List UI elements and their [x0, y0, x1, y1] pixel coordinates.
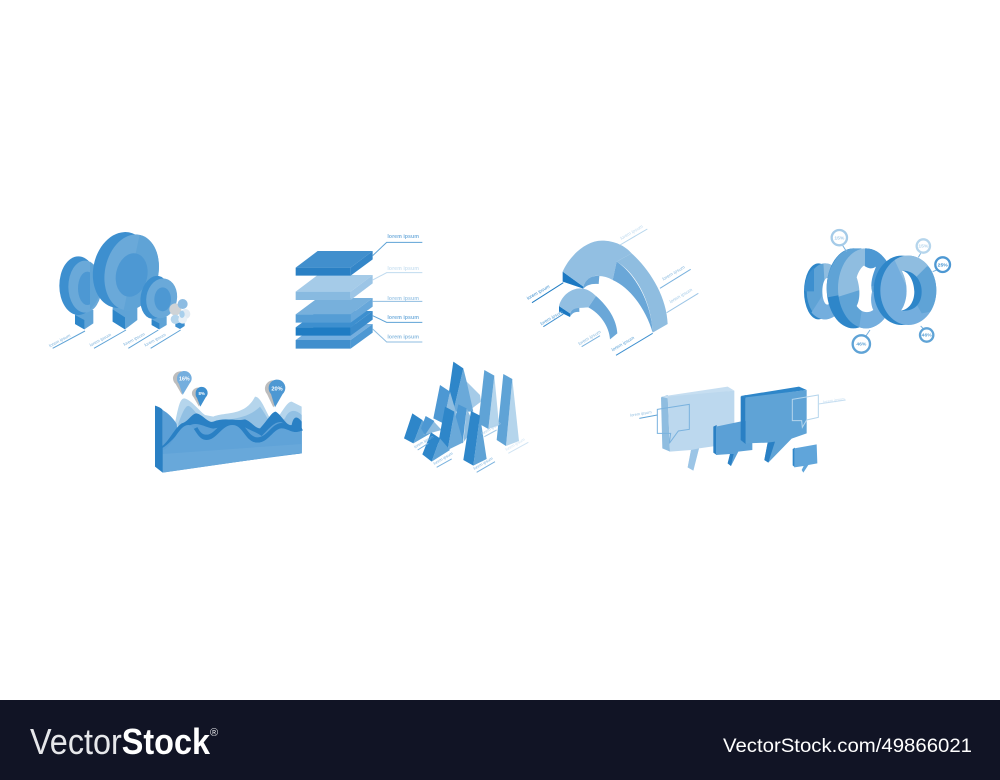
front wave and base [163, 425, 302, 473]
plate 4 [296, 311, 373, 336]
left ring [804, 263, 834, 320]
bubble: large light [661, 387, 734, 471]
plate 3 [296, 298, 373, 323]
left side wall [155, 406, 163, 473]
dark valley band [195, 422, 302, 440]
leader lines and labels: lorem ipsum [539, 309, 564, 326]
pin: 8%: 8% [199, 391, 205, 396]
base highlight strip [163, 444, 302, 473]
pin: left [59, 256, 102, 329]
panel: isometric wave area chart [155, 371, 302, 473]
pin: large [92, 232, 159, 330]
percentage callouts: 15% [918, 244, 929, 250]
prism: left low 2 [421, 416, 442, 435]
panel: interlocking donut rings [804, 230, 950, 353]
prism: front right [463, 411, 487, 466]
percentage callouts [832, 230, 950, 353]
prism: second right [478, 370, 499, 429]
leader lines and labels: lorem ipsum [526, 284, 551, 301]
leader lines and labels [48, 330, 181, 348]
prism: far right [497, 374, 519, 446]
callouts: lorem ipsum labels: lorem ipsum [387, 296, 419, 302]
outline bubble: right [792, 395, 846, 427]
callouts: lorem ipsum labels: lorem ipsum [387, 234, 419, 240]
leader lines and labels: lorem ipsum [480, 420, 502, 436]
plate 2 [296, 275, 373, 300]
percentage callouts: 15% [834, 235, 845, 241]
leader lines and labels [526, 224, 698, 355]
panel: layered plates [296, 234, 422, 349]
leader lines and labels: lorem ipsum [122, 331, 146, 347]
pin: 16% [173, 371, 192, 395]
prism: centre [452, 404, 475, 443]
leader lines and labels: lorem ipsum [577, 329, 602, 346]
leader lines and labels: lorem ipsum [432, 450, 454, 466]
prism: front left [422, 432, 450, 462]
pin: 16%: 16% [179, 376, 190, 382]
callouts: lorem ipsum labels: lorem ipsum [387, 335, 419, 341]
dark wave band [155, 412, 302, 470]
leader lines and labels [413, 420, 528, 472]
leader lines and labels: lorem ipsum [611, 335, 635, 352]
percentage callouts: 25% [938, 262, 948, 268]
leader lines and labels: lorem ipsum [619, 224, 644, 241]
leader lines and labels: lorem ipsum [661, 264, 686, 282]
leader lines and labels: lorem ipsum [48, 333, 72, 348]
pin: 8% [192, 387, 208, 407]
left fill behind wave [163, 410, 180, 457]
panel: triangular prism chart [404, 362, 528, 472]
plate 1 [296, 251, 373, 276]
panel: circle pin chart [48, 227, 190, 348]
leader lines and labels: lorem ipsum [669, 287, 693, 304]
panel: wifi-style arches [526, 224, 698, 355]
pin: 20%: 20% [271, 387, 283, 393]
mid wave layer [178, 406, 302, 457]
infographic canvas [0, 226, 1000, 780]
percentage callouts: 46% [922, 333, 932, 339]
pin: medium [137, 274, 180, 329]
bubble: medium [713, 420, 752, 466]
outline bubble: left: lorem ipsum [630, 409, 653, 418]
registered mark: ® [210, 727, 218, 739]
leader lines and labels: lorem ipsum [143, 332, 167, 348]
leader lines and labels: lorem ipsum [504, 436, 526, 452]
callouts: lorem ipsum labels: lorem ipsum [387, 266, 419, 272]
prism: front centre [438, 407, 463, 450]
leader lines and labels: lorem ipsum [472, 455, 494, 471]
pin: small with grey segment [169, 299, 190, 329]
panel: speech bubbles [630, 387, 846, 473]
bubble: small [793, 444, 817, 473]
footer image id: VectorStock.com/49866021 [723, 736, 972, 757]
leader lines and labels: lorem ipsum [89, 332, 112, 348]
callouts: lorem ipsum labels: lorem ipsum [387, 315, 419, 321]
middle blue wave [155, 422, 302, 472]
percentage callouts: 46% [856, 342, 867, 348]
prism: left low [404, 413, 432, 443]
prism: middle back [433, 385, 458, 423]
footer logo: VectorStock [30, 721, 211, 762]
back wave layer [175, 397, 302, 453]
middle ring [826, 248, 887, 328]
outline bubble: right: lorem ipsum [823, 396, 846, 404]
large arch [563, 241, 668, 333]
small arch [559, 288, 617, 339]
footer bar [0, 700, 1000, 780]
prism: back tall [449, 362, 481, 412]
callouts: lorem ipsum labels [373, 234, 422, 342]
plate 5 [296, 324, 373, 349]
bubble: large blue [741, 387, 807, 463]
pin: 20% [265, 380, 285, 407]
outline bubble: left [630, 404, 689, 443]
leader lines and labels: lorem ipsum [413, 434, 435, 449]
right ring [874, 256, 936, 325]
